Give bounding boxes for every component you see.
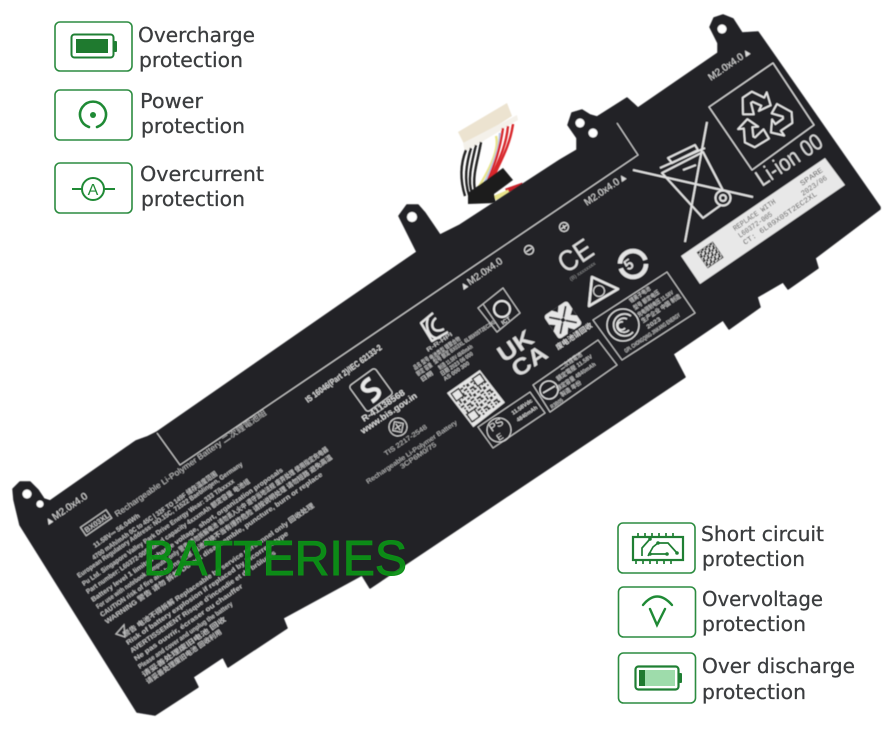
wires [461,124,523,198]
circle 5 mark [620,251,646,277]
second certificate box: R3B05 [550,398,565,411]
screw size marks: ▲M2.0x4.0 [457,256,505,293]
cable tape [468,168,513,204]
CCC box: 生产企业 中国 制造 [640,292,682,325]
KC text: 品名 型号 [412,355,431,372]
spec text block: CAUTION risk of fire and burns 注意 电池更换不当有爆炸危险 请按说明处理 请勿短路 避免高温 [98,452,334,619]
PSE box: 11.58Vdc [511,398,534,417]
KC text: 日期 2023 06 000 [439,350,475,378]
WEEE crossed bin [633,122,753,242]
KC text: 型号 额定 BX03XL 6L89X05T2EC2XL [432,317,498,366]
overcharge text [138,23,255,72]
overcharge text: Overcharge [138,23,255,47]
ammeter icon [72,178,115,200]
connector plug [458,103,512,146]
voltage icon [643,596,672,625]
circuit icon [633,533,683,564]
spec text block: Battery level 1 limited charge voltage, short, organization proposals [90,467,285,604]
spec text block: European Regulatory Address: NO.15C, 71522 Baeblingen, Germany [76,461,244,580]
overvoltage icon box [618,587,696,637]
small battery labels: 3CP6M0/75 [399,441,438,471]
KC text: 日期 [419,369,435,384]
screw size marks [42,46,754,528]
Q mark: ICT [501,316,512,327]
recycle cross mark [544,301,582,339]
second certificate box: 製造 年份 [559,379,583,399]
over discharge text [702,654,855,704]
cross lines [633,122,753,242]
over discharge icon box [618,653,696,703]
watermark: BATTERIES [143,532,407,586]
label panel outline [157,123,638,465]
CCC box [593,272,695,360]
over discharge text: protection [702,680,806,704]
datamatrix [697,242,723,268]
short circuit icon box [618,523,695,573]
CCC box: 充电限制电压 11.58V [636,288,675,319]
over discharge text: Over discharge [702,654,855,678]
BIS mark [349,368,393,412]
white spare label: 2023/06 [800,175,830,198]
overcharge battery icon [72,34,117,58]
circle 5 mark: 5 [621,256,637,274]
second certificate box: 額定電壓 11.58V [555,352,594,383]
second certificate box [533,340,617,412]
second certificate box: 二次鋰電池 [558,350,584,372]
plug collar [463,115,518,152]
CCC box: GPI. CHONGQING JINKANG ENERGY [624,313,682,355]
power icon box [55,90,132,140]
Li-ion label: Li-ion 00 [750,128,827,191]
spec text block: Ne pas ouvrir, écraser ou chauffer [133,583,245,663]
KC text: 制造 11.58V 4840mAh [437,342,475,372]
spec text block: 11.58V⎓ 56.04Wh [92,513,141,550]
small battery labels: TIS 2217-2548 [383,424,429,458]
overvoltage text: Overvoltage [702,587,823,611]
CE caption: (B) xxxxxxxx [569,261,597,283]
over discharge item [618,653,855,704]
polarity marks [524,222,568,254]
PSE box [478,392,545,448]
spec text block: 请妥善处理废旧电池 回收 [140,614,228,679]
short circuit item [618,522,824,573]
power icon [80,102,106,127]
CCC box: 2023 [646,316,663,331]
recycle caption: 废电池请回收 [554,321,594,352]
white spare label: CT: 6L89X05T2EC2XL [742,191,820,247]
recycling box [709,63,814,170]
short circuit text: protection [702,547,805,571]
triangle mark [589,277,618,306]
low battery icon [636,666,682,690]
overvoltage text [702,587,823,636]
white spare label: SPARE [799,167,826,188]
spec text block [76,407,334,686]
bin wheel [716,190,730,206]
KC text: 额定 容量 [415,361,434,378]
UKCA mark: CA [506,339,552,382]
CCC box: 锂离子电池 [628,285,652,305]
spec text block: 请妥善处理废旧电池 回收利用 [144,627,223,686]
screw size marks: M2.0x4.0▲ [706,46,754,83]
bin lid [660,145,705,168]
model box: BX03XL [83,511,111,535]
connector cable [458,103,523,204]
overvoltage item [618,587,823,637]
mounting holes [22,24,726,508]
spec text block: For use with notebook computer only 警告 请勿拆解电池 请勿丢入火中 遵守当地法规 废弃处理 使用指定充电器 [94,444,330,611]
IS standard text: IS 16046(Part 2)/IEC 62133-2 [303,342,384,405]
KC mark [421,313,448,341]
overcurrent item [55,162,264,213]
warning triangle [116,625,125,637]
white spare label: REPLACE WITH [732,199,778,233]
screw size marks: M2.0x4.0▲ [582,171,630,208]
Q mark [478,288,520,332]
overcurrent icon box [55,163,132,213]
screw size marks: ▲M2.0x4.0 [42,491,90,528]
overcurrent text: Overcurrent [140,162,264,186]
overcharge icon box [55,22,132,71]
spec text block: Rechargeable Li-Polymer Battery 二次鋰電池組 [112,407,268,519]
power text: Power [140,89,204,113]
bin body [662,152,728,218]
overcharge text: protection [139,48,243,72]
spec text block: Risk of battery explosion if replaced by incorrect type [125,530,290,647]
power item [55,89,245,140]
short circuit text [701,522,824,571]
PSE box: E [495,431,505,443]
UKCA mark: UK [492,324,539,367]
spec text block: 警告 电池不得拆解 Replaceable by service personnel only 回收处理 [121,501,316,639]
overcharge item [55,22,255,72]
spec text block: Please and cover and unplug the battery [137,601,235,671]
TIS mark [386,415,410,439]
power text: protection [141,114,245,138]
BIS registration: R-41138568 [360,387,407,424]
white spare label: L60372-005 [737,211,775,240]
white spare label [681,158,845,284]
spec text block: Part number: L60372-005 Rated capacity 4xxxmAh 额定容量 电池组 [84,476,252,596]
overcurrent text [140,162,264,211]
overcurrent text: protection [141,187,245,211]
QR code [447,369,506,428]
power text [140,89,245,138]
KC text [412,317,498,384]
short circuit text: Short circuit [701,522,824,546]
BIS registration: www.bis.gov.in [358,390,419,436]
second certificate box: 額定容量 4840mAh [555,360,598,393]
small battery labels: Rechargeable Li-Polymer Battery [365,419,459,486]
spec text block: WARNING 警告 请勿 拆解 Do not disassemble, puncture, burn or replace [103,470,324,626]
spec text block: Pu Ltd. Singapore Valley Park Drive Energy Wear: 333 T/kxxxx [81,478,236,588]
ammeter icon: A [88,182,99,199]
PSE box: 4840mAh [516,405,540,424]
CCC box: 型号 额定电压 [632,288,661,312]
recycling symbol [719,77,806,163]
PSE box: PS [487,416,506,434]
overvoltage text: protection [702,612,806,636]
spec text block: AVERTISSEMENT Risque d'incendie et de brûlures [129,550,278,655]
KC text: AS 000 300 [443,361,471,383]
spec text block: 4700 mAh/mAh 0C to 45C | 32F TO 149F 储存温度范围 [90,469,219,562]
KC text: R-R-HPI [426,332,454,354]
KC text: 电池类型 锂聚合物 [428,335,462,362]
UKCA mark [492,324,552,382]
CE mark: CE [552,233,600,280]
